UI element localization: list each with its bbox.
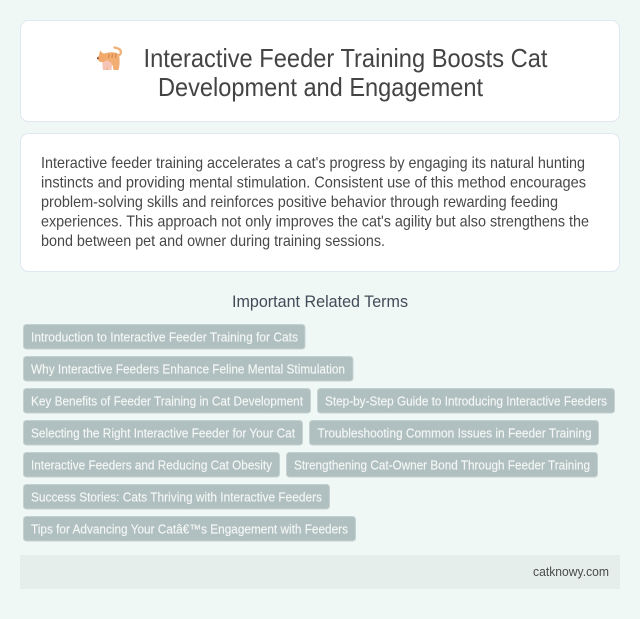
description text: bond between pet and owner during training sessions. — [41, 233, 385, 250]
tag: mental stimulation: Why Interactive Feeders Enhance Feline Mental Stimulation — [31, 362, 345, 376]
tag: reducing obesity: Interactive Feeders and Reducing Cat Obesity — [31, 458, 272, 472]
title text — [144, 43, 548, 102]
tag: mental stimulation — [24, 356, 353, 381]
tag: tips — [24, 516, 356, 541]
description text: problem-solving skills and reinforces positive behavior through rewarding feeding — [41, 194, 558, 211]
description text: instincts and providing mental stimulation. Consistent use of this method encourages — [41, 174, 586, 192]
tag: troubleshooting — [310, 420, 598, 445]
panel: description — [20, 134, 620, 272]
panel: title header — [20, 20, 620, 122]
tag: cat-owner bond — [286, 452, 598, 477]
related terms tags — [24, 324, 614, 541]
tag: introduction — [24, 324, 305, 349]
tag: selecting feeder: Selecting the Right Interactive Feeder for Your Cat — [31, 426, 295, 440]
description text: Interactive feeder training accelerates a cat's progress by engaging its natural hunting — [41, 155, 585, 172]
tag: cat-owner bond: Strengthening Cat-Owner Bond Through Feeder Training — [294, 458, 590, 472]
tag: success stories — [24, 484, 330, 509]
title text: Interactive Feeder Training Boosts Cat — [144, 43, 548, 73]
tag: introduction: Introduction to Interactive Feeder Training for Cats — [31, 330, 298, 344]
tag: success stories: Success Stories: Cats Thriving with Interactive Feeders — [31, 490, 322, 504]
tag: key benefits — [24, 388, 310, 413]
tag: reducing obesity — [24, 452, 280, 477]
description text — [41, 155, 589, 250]
icon: orange cat — [97, 48, 121, 70]
tag: tips: Tips for Advancing Your Catâ€™s Engagement with Feeders — [31, 522, 348, 536]
title text: Development and Engagement — [158, 72, 484, 102]
tag: step-by-step guide: Step-by-Step Guide to Introducing Interactive Feeders — [325, 394, 607, 408]
tag: troubleshooting: Troubleshooting Common Issues in Feeder Training — [318, 426, 592, 440]
tag: selecting feeder — [24, 420, 302, 445]
heading: important related terms: Important Related Terms — [232, 293, 408, 311]
description text: experiences. This approach not only improves the cat's agility but also strengthens the — [41, 214, 589, 230]
tag: step-by-step guide — [318, 388, 614, 413]
tag: key benefits: Key Benefits of Feeder Training in Cat Development — [31, 394, 303, 408]
footer source text: catknowy.com — [533, 565, 609, 579]
footer — [20, 555, 620, 589]
